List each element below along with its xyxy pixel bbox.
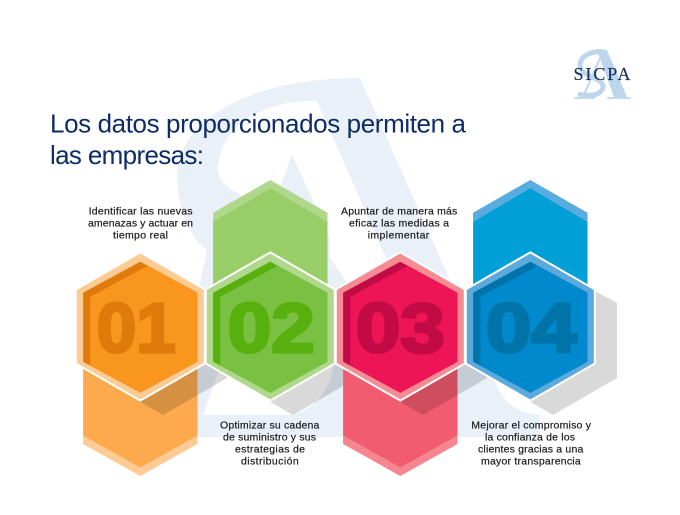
text: step 1: amenazas y actuar en	[88, 217, 193, 229]
title	[50, 108, 467, 170]
text: step 4: clientes gracias a una	[478, 443, 583, 455]
text: step 2: Optimizar su cadena	[220, 419, 319, 431]
logo wordmark: SICPA	[574, 64, 630, 84]
number 01: 01	[97, 289, 176, 367]
hexagon shadow	[229, 268, 357, 415]
hexagon group 01	[77, 254, 227, 476]
main hexagon	[77, 254, 204, 400]
hexagon group 04	[467, 180, 617, 415]
upper hexagon	[213, 180, 328, 330]
hexagon group 03	[337, 254, 487, 476]
text: step 4: Mejorar el compromiso y	[471, 419, 592, 431]
lower hexagon	[83, 340, 198, 476]
text: step 1: tiempo real	[113, 229, 168, 241]
hexagon group 02	[207, 180, 357, 415]
text: step 4: mayor transparencia	[481, 455, 581, 467]
text: step 1: Identificar las nuevas	[89, 205, 193, 217]
main hexagon	[207, 254, 334, 400]
background watermark logo	[177, 78, 540, 437]
text: step 3: Apuntar de manera más	[341, 205, 457, 217]
text: step 2: distribución	[241, 455, 299, 467]
text: step 3	[341, 205, 457, 241]
main hexagon	[337, 254, 464, 400]
number 02: 02	[228, 289, 315, 367]
text: step 3: implementar	[368, 229, 430, 241]
text: step 2: estrategias de	[235, 443, 305, 455]
text: step 2	[220, 419, 319, 467]
text: step 4	[471, 419, 592, 467]
logo: SICPA	[574, 50, 631, 98]
lower hexagon	[343, 340, 458, 476]
title: Los datos proporcionados permiten a	[50, 108, 467, 138]
hexagon shadow	[359, 268, 487, 415]
text: step 1	[88, 205, 193, 241]
text: step 3: eficaz las medidas a	[349, 217, 449, 229]
main hexagon	[467, 254, 594, 400]
number 03: 03	[356, 289, 445, 367]
text: step 2: de suministro y sus	[223, 431, 316, 443]
hexagon shadow	[489, 268, 617, 415]
upper hexagon	[473, 180, 588, 330]
number 04: 04	[486, 289, 577, 367]
hexagon shadow	[99, 268, 227, 415]
text: step 4: la confianza de los	[485, 431, 575, 443]
title: las empresas:	[50, 140, 204, 170]
